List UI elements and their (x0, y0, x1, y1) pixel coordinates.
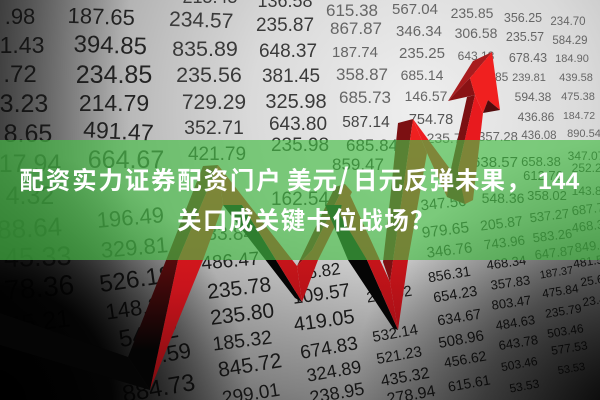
number table background: 347.56 (420, 193, 467, 214)
number table background: 508.96 (437, 327, 485, 352)
number table background: 235.25 (399, 45, 445, 62)
number table background: 235.87 (256, 15, 314, 36)
arrow tail: black shaft (0, 313, 150, 390)
number table background: 647.87 (534, 243, 575, 262)
title: 配资实力证券配资门户 (20, 167, 282, 195)
green translucent band (0, 140, 600, 260)
title: ？ (410, 208, 434, 235)
number table background: 634.67 (436, 307, 483, 329)
number table background: 53.53 (508, 377, 541, 396)
number table background: 615.38 (326, 1, 378, 20)
number table background: 729.29 (182, 91, 246, 114)
number table background: 567.04 (392, 1, 438, 18)
number table background: 17.94 (0, 150, 61, 178)
number table background: 537.27 (529, 206, 570, 225)
number table background: 845.72 (216, 349, 284, 382)
number table background: 526.18 (98, 261, 174, 298)
number table background: 234.70 (550, 16, 586, 28)
number table background: 235.80 (209, 299, 275, 330)
number table background: 654.23 (432, 284, 479, 306)
number table background: 548.36 (482, 190, 525, 206)
number table background: 78.36 (3, 269, 75, 306)
title: 美元 (287, 167, 338, 195)
number table background: 233.84 (196, 224, 254, 245)
number table background: 8.65 (4, 120, 52, 148)
number table background: 532.14 (371, 321, 419, 346)
number table background: 674.83 (299, 333, 359, 364)
number table background: 754.78 (409, 112, 453, 128)
number table background: 45.21 (6, 304, 72, 340)
number table background: 867.87 (330, 19, 382, 38)
number table background: 678.43 (509, 51, 547, 65)
number table background: .72 (3, 61, 37, 88)
number table background: 456.62 (443, 347, 488, 371)
number table background: 475.84 (541, 281, 580, 301)
number table background: 419.05 (292, 306, 356, 336)
number table background: 484.63 (494, 312, 536, 333)
number table background: 187.37 (539, 264, 574, 282)
number table background: 612.76 (523, 168, 563, 183)
number table background: 381.45 (262, 66, 320, 87)
number table background: 615.61 (447, 371, 492, 395)
number table background: 358.02 (527, 188, 567, 203)
number table background: 109.57 (291, 280, 351, 309)
title: 日元反弹未果， (353, 167, 532, 195)
number table background: 475.38 (561, 91, 595, 103)
number table background: 187.74 (332, 44, 378, 61)
leg 6 falling (413, 119, 473, 204)
number table background: 439.58 (559, 72, 593, 84)
number table background: 856.31 (427, 263, 472, 285)
title (20, 158, 580, 235)
number table background: 325.98 (265, 91, 327, 113)
number table background: 803.47 (491, 292, 532, 313)
number table background: 148.25 (104, 291, 174, 325)
number table background: 486.47 (201, 249, 260, 275)
number table background: 234.57 (169, 8, 234, 33)
number table background: 979.65 (421, 219, 470, 242)
number table background: 643.78 (497, 332, 539, 353)
number table background: 235.57 (506, 30, 544, 44)
number table background: 235.85 (472, 70, 509, 84)
number table background: 187.65 (67, 3, 135, 30)
number table background: 648.37 (259, 41, 317, 62)
number table background: 4.32 (6, 182, 54, 210)
leg 1 side and front (128, 165, 223, 390)
number table background: 594.38 (515, 90, 552, 104)
title: / (338, 158, 349, 198)
number table background: 859.47 (332, 155, 384, 174)
number table background: 587.14 (342, 114, 390, 131)
number table background: 235.85 (451, 5, 494, 21)
number table background: 235.78 (206, 273, 272, 304)
number table background: 491.47 (83, 116, 154, 146)
number table background: 235.78 (427, 130, 470, 146)
number table background: 685.14 (401, 67, 444, 83)
number table background: 643.18 (458, 49, 495, 63)
number table background: 643.80 (269, 114, 327, 135)
number table background: 54.12 (117, 316, 181, 353)
number table background: 394.85 (73, 31, 147, 60)
number table background: 435.32 (380, 365, 431, 390)
title: 144 (538, 168, 580, 195)
number table background: 234.85 (76, 61, 152, 89)
number table background: 583.26 (532, 226, 573, 245)
number table background: 184.90 (555, 53, 589, 65)
leg 2 falling (218, 165, 302, 302)
number table background: 45.33 (3, 241, 72, 273)
number table background: 3.23 (0, 90, 48, 118)
arrow head (448, 52, 500, 113)
number table background: 436.08 (521, 130, 557, 142)
number table background: 358.87 (336, 65, 388, 84)
number table background: 1.43 (0, 32, 44, 58)
number table background: 503.46 (546, 321, 585, 341)
number table background: .98 (5, 4, 35, 29)
number table background: 196.49 (96, 202, 165, 233)
number table background: 421.79 (188, 144, 246, 165)
number table background: 352.71 (184, 117, 244, 139)
number table background: 503.46 (500, 354, 539, 374)
number table background: 346.76 (426, 239, 473, 262)
leg 3 rising (297, 184, 352, 302)
number table background: 53.53 (557, 361, 586, 377)
number table background: 235.56 (176, 63, 242, 87)
leg 4 falling (325, 184, 398, 330)
number table background: 685.73 (339, 88, 391, 107)
number table background: 577.53 (550, 338, 589, 358)
number table background: 162.54 (271, 189, 329, 210)
number table background: 890.54 (567, 128, 600, 140)
leg 5 rising to second peak (383, 119, 427, 330)
number table background: 743.96 (483, 233, 526, 252)
number table background: 185.32 (211, 326, 273, 356)
number table background: 235.98 (271, 135, 329, 156)
rising red zigzag arrow (0, 52, 500, 390)
number table background: 436.86 (518, 110, 555, 124)
arrow shaft (447, 95, 483, 204)
number table background: 306.58 (455, 25, 498, 41)
number table background: 584.29 (552, 35, 588, 47)
title: 关口成关键卡位战场 (177, 206, 410, 235)
number table background: 56.82 (297, 259, 342, 284)
number table background: 664.67 (88, 146, 164, 174)
number table background: 658.38 (521, 154, 561, 169)
number table background: 638.57 (472, 154, 518, 171)
number table background: 357.83 (490, 272, 531, 293)
number table background: 235.79 (544, 301, 583, 321)
number table background: 685.84 (346, 136, 398, 155)
number table background: 205.87 (479, 212, 524, 234)
number table background: 78.59 (134, 338, 193, 372)
number table background: 521.23 (375, 343, 423, 368)
number table background: 346.34 (396, 23, 442, 40)
number table background: 235.62 (365, 283, 413, 307)
number table background: 357.28 (478, 129, 518, 144)
number table background: 356.25 (504, 11, 542, 25)
number table background: 214.79 (79, 90, 149, 116)
number table background: 184.72 (563, 110, 595, 122)
number table background: 324.89 (305, 356, 363, 386)
number table background: 835.89 (172, 37, 238, 61)
number table background: 239.81 (512, 72, 546, 84)
number table background: 146.57 (405, 88, 448, 104)
number table background: 468.34 (486, 252, 527, 273)
number table background: 329.81 (100, 232, 169, 263)
